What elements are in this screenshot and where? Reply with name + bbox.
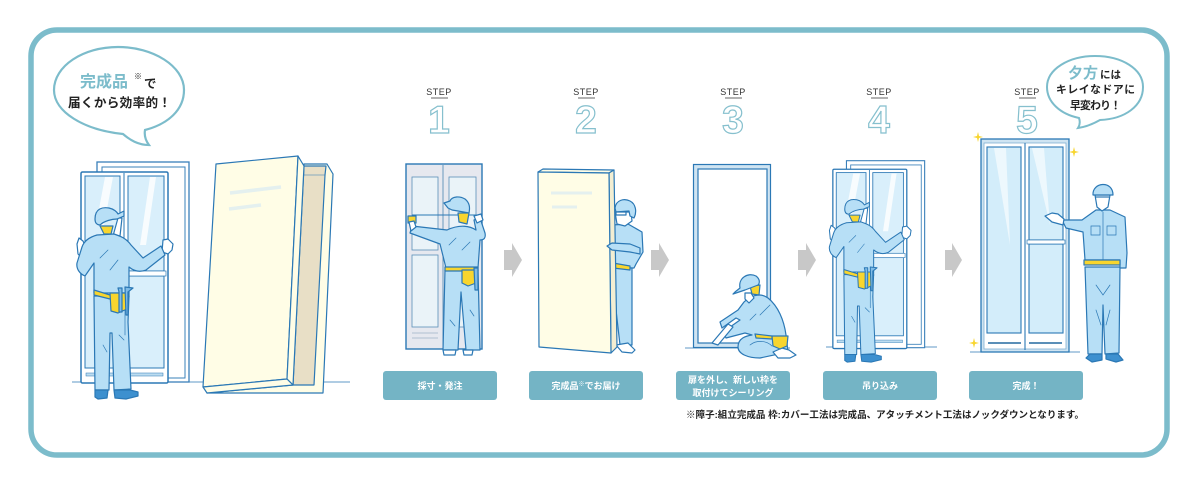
sparkles: [969, 132, 1079, 348]
box lid behind: [207, 164, 333, 393]
box bottom strip: [203, 379, 293, 393]
new door: [981, 139, 1069, 352]
step 4 heading: 4: [868, 99, 890, 142]
label button: step 3: 扉を外し、新しい枠を: [688, 374, 778, 385]
label button: step 5: [969, 371, 1083, 400]
speech bubble: new door by evening: 夕方: [1068, 64, 1098, 82]
step 5 heading: STEP: [1014, 87, 1040, 97]
step 5 illustration: finished door: [969, 132, 1127, 362]
tape measure: [412, 214, 478, 216]
step 3 heading: STEP: [720, 87, 746, 97]
step 1 heading: STEP: [426, 87, 452, 97]
label button: step 4: [823, 371, 937, 400]
label button: step 2: でお届け: [585, 381, 621, 391]
speech bubble: finished product: ※: [134, 72, 142, 81]
step 1 heading: [426, 87, 452, 142]
door with worker: intro illustration: [77, 162, 189, 399]
step 2 heading: 2: [575, 99, 597, 142]
old door: [406, 164, 482, 349]
ground line: [685, 347, 790, 349]
speech bubble: finished product: 完成品: [80, 72, 128, 91]
worker seen from the back: [77, 208, 173, 399]
label button: step 2: 完成品: [551, 381, 578, 391]
label button: step 4: 吊り込み: [862, 380, 898, 391]
step 4 illustration: hanging the door: [826, 161, 937, 362]
worker hand and arm: [607, 243, 640, 254]
step 5 heading: 5: [1016, 99, 1038, 142]
new door frame: [694, 164, 770, 348]
step 2 heading: [573, 87, 599, 142]
label button: step 2: ※: [578, 381, 585, 388]
label button: step 5: 完成！: [1012, 380, 1040, 391]
step 2 heading: STEP: [573, 87, 599, 97]
ground line: left: [72, 381, 350, 383]
footnote: ※障子:組立完成品 枠:カバー工法は完成品、アタッチメント工法はノックダウンとなります。: [686, 409, 1084, 421]
speech bubble: new door by evening: [1047, 56, 1143, 128]
label button: step 1: [383, 371, 497, 400]
speech bubble: finished product: 届くから効率的！: [68, 95, 171, 110]
label button: step 1: 採寸・発注: [417, 380, 463, 391]
step 1 heading: 1: [428, 99, 450, 142]
arrow: step 3 to 4: [798, 243, 816, 277]
worker measuring: [408, 197, 485, 355]
worker kneeling: [712, 275, 796, 358]
arrow: step 2 to 3: [651, 243, 669, 277]
box side strip: [287, 156, 304, 385]
speech bubble: finished product: で: [144, 77, 157, 91]
worker carrying the box: [609, 200, 643, 353]
step 3 heading: 3: [722, 99, 744, 142]
delivered box: [203, 156, 333, 393]
box: [538, 169, 617, 353]
arrow: step 1 to 2: [504, 243, 522, 277]
step 3 illustration: new frame and sealing: [685, 164, 796, 358]
door leaf: [81, 172, 168, 383]
speech bubble: finished product: [54, 47, 184, 145]
box interior: [293, 166, 326, 385]
arrow: step 4 to 5: [945, 243, 962, 277]
speech bubble: new door by evening: 早変わり！: [1070, 98, 1121, 112]
box front face: [203, 156, 298, 387]
label button: step 3: 取付けてシーリング: [692, 387, 774, 398]
worker presenting: [1045, 184, 1127, 362]
speech bubble: new door by evening: キレイなドアに: [1056, 83, 1135, 96]
door frame behind: [97, 162, 189, 382]
label button: step 2: [529, 371, 643, 400]
step 3 heading: [720, 87, 746, 142]
step 1 illustration: measuring old door: [406, 164, 485, 355]
step 2 illustration: delivery: [538, 169, 643, 353]
step 5 heading: [1014, 87, 1040, 142]
step 4 heading: STEP: [866, 87, 892, 97]
step 4 heading: [866, 87, 892, 142]
speech bubble: new door by evening: には: [1100, 69, 1122, 81]
label button: step 3: [676, 371, 790, 400]
